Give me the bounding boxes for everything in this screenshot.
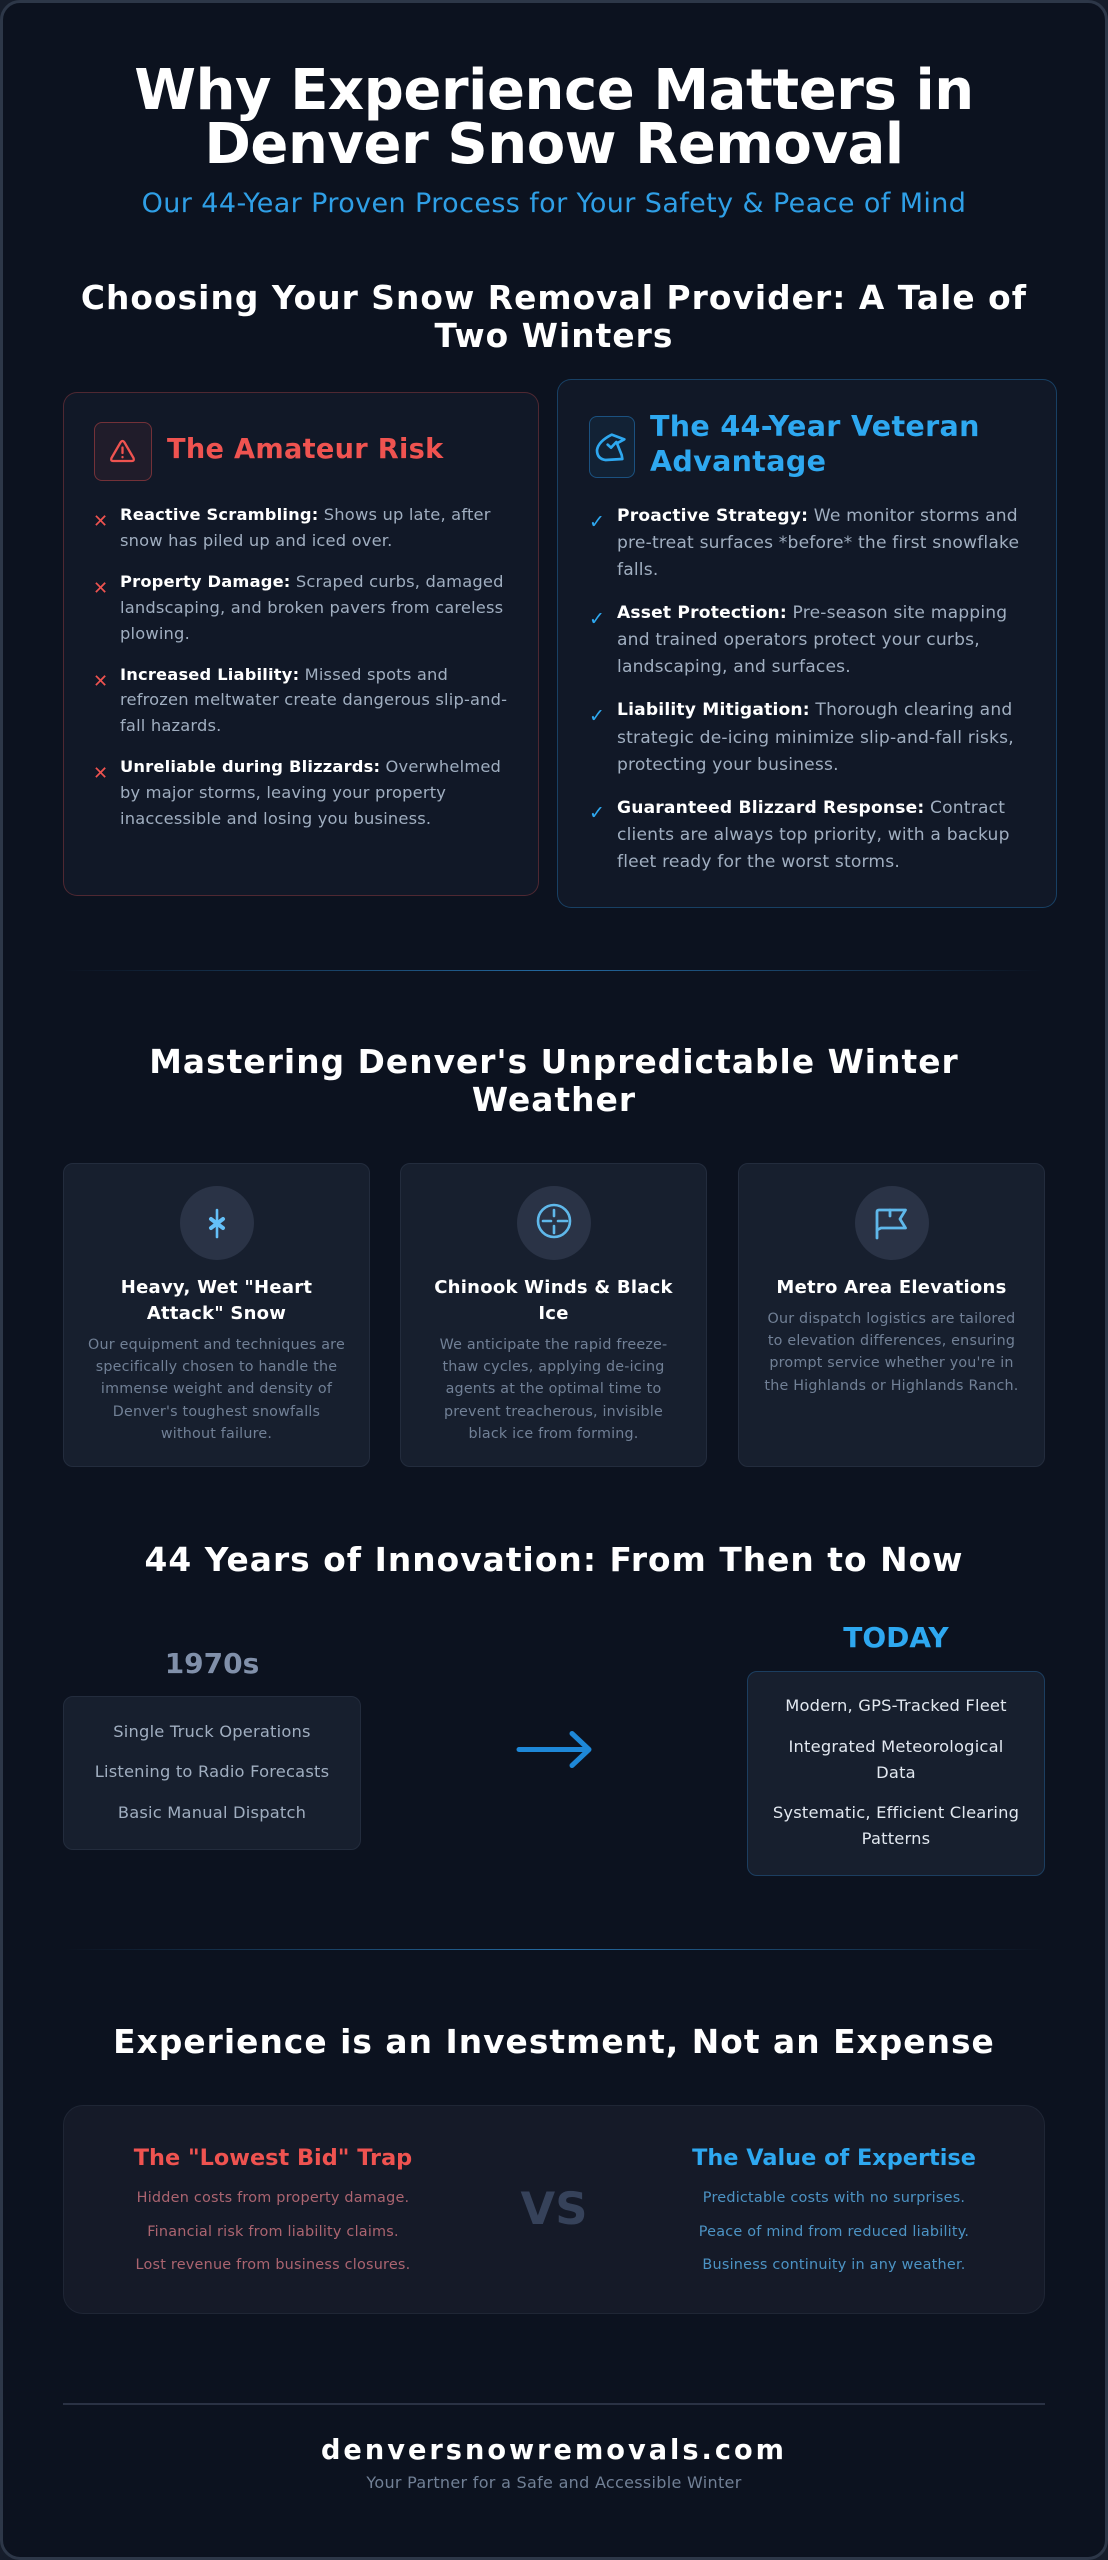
right item 2: Peace of mind from reduced liability. <box>699 2224 969 2240</box>
item 1: Proactive Strategy: We monitor storms and <box>617 506 1018 526</box>
item 3: Liability Mitigation: Thorough clearing and <box>617 700 1012 720</box>
line 2: Data <box>876 1762 916 1782</box>
mark 1: ✕ <box>93 511 108 532</box>
card title: Ice <box>538 1303 569 1324</box>
item 3 <box>120 665 507 735</box>
heading: innovation: 44 Years of Innovation: From Then to Now <box>144 1541 964 1579</box>
item 3: protecting your business. <box>617 755 839 775</box>
item 1: Reactive Scrambling: Shows up late, after <box>120 505 491 524</box>
card text: thaw cycles, applying de-icing <box>442 1359 665 1375</box>
heading: veteran advantage <box>650 409 980 478</box>
card text: Denver's toughest snowfalls <box>113 1404 320 1420</box>
item 2: and trained operators protect your curbs, <box>617 630 980 650</box>
line 2: Listening to Radio Forecasts <box>95 1762 329 1781</box>
icon: snowflake <box>180 1186 254 1260</box>
item 2: Asset Protection: Pre-season site mapping <box>617 603 1007 623</box>
heading: tale of two winters: Two Winters <box>435 317 673 355</box>
panel: heavy snow <box>63 1163 370 1467</box>
heading: veteran advantage: Advantage <box>650 444 826 478</box>
left item 1: Hidden costs from property damage. <box>137 2190 409 2206</box>
item 3: Increased Liability: Missed spots and <box>120 665 448 684</box>
left item 3: Lost revenue from business closures. <box>136 2257 410 2273</box>
card text: to elevation differences, ensuring <box>768 1333 1015 1349</box>
item 4: clients are always top priority, with a backup <box>617 825 1010 845</box>
card title: Chinook Winds & Black <box>434 1277 673 1298</box>
item 4: Unreliable during Blizzards: Overwhelmed <box>120 757 501 776</box>
heading: denver weather <box>149 1043 959 1119</box>
line 3 <box>773 1803 1019 1848</box>
card text: agents at the optimal time to <box>446 1381 661 1397</box>
item 3: fall hazards. <box>120 716 222 735</box>
check 1: ✓ <box>589 511 605 533</box>
right title: The Value of Expertise <box>692 2145 976 2171</box>
title: Why Experience Matters in <box>134 58 974 122</box>
item 4: fleet ready for the worst storms. <box>617 852 900 872</box>
left title: The "Lowest Bid" Trap <box>134 2145 412 2171</box>
card text: specifically chosen to handle the <box>96 1359 337 1375</box>
panel: today list <box>747 1671 1045 1876</box>
item 1 <box>617 506 1019 580</box>
panel: chinook winds <box>400 1163 707 1467</box>
card text <box>440 1337 667 1442</box>
item 4 <box>120 757 501 828</box>
card text: Our equipment and techniques are <box>88 1337 345 1353</box>
item 3: strategic de-icing minimize slip-and-fall risks, <box>617 728 1014 748</box>
card text: Our dispatch logistics are tailored <box>768 1311 1015 1327</box>
card text: prevent treacherous, invisible <box>444 1404 663 1420</box>
item 4 <box>617 798 1010 872</box>
card text: the Highlands or Highlands Ranch. <box>764 1378 1019 1394</box>
item 4: Guaranteed Blizzard Response: Contract <box>617 798 1005 818</box>
heading: investment: Experience is an Investment, Not an Expense <box>113 2022 995 2060</box>
card text: We anticipate the rapid freeze- <box>440 1337 667 1353</box>
item 4: by major storms, leaving your property <box>120 783 446 802</box>
title <box>134 58 974 177</box>
check 4: ✓ <box>589 802 605 824</box>
icon: shield gauge <box>589 416 635 478</box>
card text: immense weight and density of <box>101 1381 332 1397</box>
panel: the 44-year veteran advantage <box>557 379 1057 908</box>
item 2 <box>120 572 504 643</box>
card text <box>764 1311 1019 1394</box>
heading: veteran advantage: The 44-Year Veteran <box>650 409 980 443</box>
item 2 <box>617 603 1007 677</box>
panel: cost comparison <box>63 2105 1045 2314</box>
card text <box>88 1337 345 1442</box>
icon: warning triangle <box>94 422 152 481</box>
footer tagline: Your Partner for a Safe and Accessible Winter <box>366 2473 742 2492</box>
subtitle: Our 44-Year Proven Process for Your Safety & Peace of Mind <box>142 188 966 218</box>
panel: metro elevations <box>738 1163 1045 1467</box>
vs label: VS <box>521 2182 587 2234</box>
item 2: plowing. <box>120 624 190 643</box>
card title: Heavy, Wet "Heart <box>121 1277 312 1298</box>
item 1: falls. <box>617 560 658 580</box>
panel background: amateur <box>63 392 539 896</box>
item 1: pre-treat surfaces *before* the first snowflake <box>617 533 1019 553</box>
mark 2: ✕ <box>93 578 108 599</box>
check 2: ✓ <box>589 608 605 630</box>
left item 2: Financial risk from liability claims. <box>147 2224 399 2240</box>
panel: the amateur risk <box>63 392 539 896</box>
heading: amateur risk: The Amateur Risk <box>167 434 444 465</box>
label: 1970s: 1970s <box>165 1647 259 1680</box>
line 2 <box>789 1736 1003 1782</box>
card title: Attack" Snow <box>147 1303 286 1324</box>
right item 3: Business continuity in any weather. <box>702 2257 966 2273</box>
mark 3: ✕ <box>93 671 108 692</box>
item 1 <box>120 505 491 550</box>
heading: tale of two winters: Choosing Your Snow Removal Provider: A Tale of <box>81 279 1027 317</box>
check 3: ✓ <box>589 705 605 727</box>
item 3 <box>617 700 1014 775</box>
line 3: Systematic, Efficient Clearing <box>773 1803 1019 1822</box>
line 3: Patterns <box>862 1829 930 1848</box>
arrow <box>516 1731 592 1768</box>
card text: without failure. <box>161 1426 272 1442</box>
line 1: Modern, GPS-Tracked Fleet <box>785 1696 1007 1715</box>
item 2: landscaping, and surfaces. <box>617 657 851 677</box>
heading: tale of two winters <box>81 279 1027 355</box>
card text: black ice from forming. <box>468 1426 639 1442</box>
item 4: inaccessible and losing you business. <box>120 809 431 828</box>
line 3: Basic Manual Dispatch <box>118 1802 306 1822</box>
footer domain: denversnowremovals.com <box>321 2435 787 2466</box>
title: Denver Snow Removal <box>204 112 904 177</box>
item 1: snow has piled up and iced over. <box>120 531 392 550</box>
item 3: refrozen meltwater create dangerous slip-and- <box>120 690 507 709</box>
icon: flag <box>855 1186 929 1260</box>
card text: prompt service whether you're in <box>769 1355 1014 1371</box>
right item 1: Predictable costs with no surprises. <box>703 2190 965 2206</box>
item 2: Property Damage: Scraped curbs, damaged <box>120 572 504 591</box>
item 2: landscaping, and broken pavers from careless <box>120 598 503 617</box>
line 1: Single Truck Operations <box>113 1722 311 1740</box>
card title: Metro Area Elevations <box>776 1277 1007 1298</box>
heading: denver weather: Weather <box>472 1081 636 1119</box>
card title <box>434 1277 673 1324</box>
mark 4: ✕ <box>93 763 108 784</box>
icon: crosshair <box>517 1186 591 1260</box>
label: today: TODAY <box>843 1621 949 1654</box>
panel background: veteran <box>557 379 1057 908</box>
line 2: Integrated Meteorological <box>789 1736 1003 1756</box>
panel: 1970s list <box>63 1696 361 1850</box>
heading: denver weather: Mastering Denver's Unpredictable Winter <box>149 1043 959 1081</box>
card title <box>121 1277 312 1324</box>
